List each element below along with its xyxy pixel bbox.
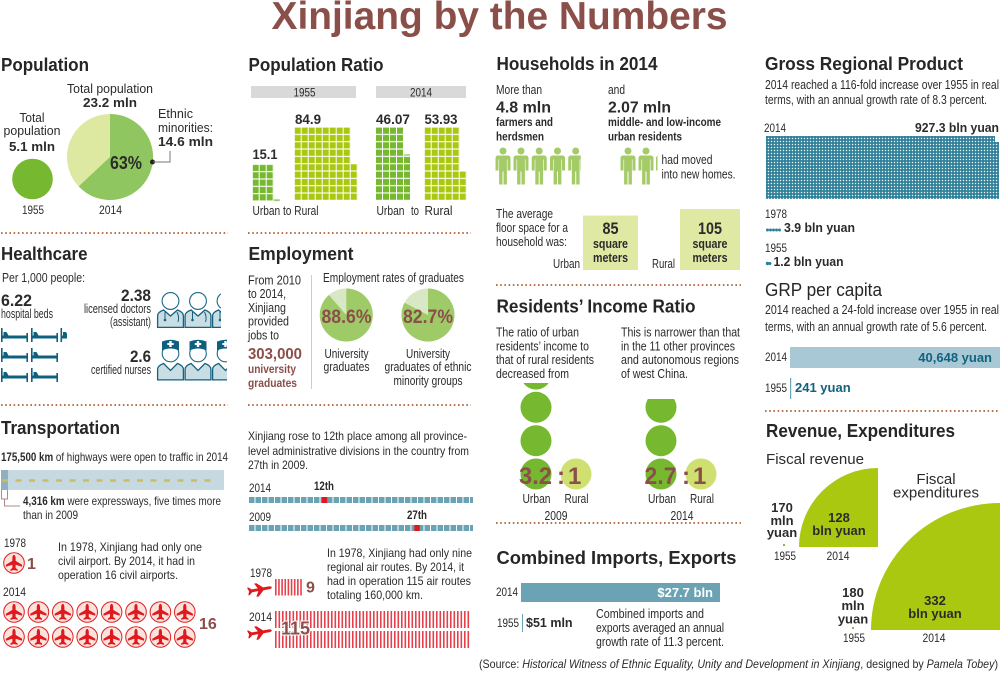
year labels: expenditures [843, 631, 946, 645]
text: growth rate: growth rate of 11.3 percent. [596, 635, 724, 649]
bar: 1955: 1955 [497, 616, 519, 630]
rank strip: 2009 [249, 508, 473, 531]
bar: per capita 1955: 1955 [765, 381, 787, 395]
bar: 1955: $51 mln [526, 616, 573, 630]
panel: healthcare [1, 244, 238, 382]
box: urban floor space: 85 [602, 219, 618, 238]
callout: expressways [2, 490, 221, 522]
box: urban floor space: Urban [553, 257, 580, 271]
heading: population: Population [1, 55, 89, 75]
label: 1955 total population: Total [20, 110, 45, 125]
year labels: 2014 [99, 203, 122, 217]
text: province rank: Xinjiang rose to 12th place among all province- [248, 429, 467, 443]
stat: licensed doctors: (assistant) [110, 315, 151, 329]
pie: ethnic minority graduates [401, 288, 454, 342]
stat: farmers and herdsmen: 4.8 mln [496, 100, 551, 116]
bar: 1955 [497, 614, 573, 632]
callout: ethnic minorities: Ethnic [158, 106, 193, 121]
text: province rank: level administrative divisions in the country from [248, 444, 469, 458]
icon row: nurses [156, 340, 227, 380]
text: fiscal expenditures label: Fiscal [916, 471, 956, 488]
chart: 2009 ratio: Rural [564, 492, 588, 506]
stat: urban residents: middle- and low-income [608, 115, 721, 129]
box: rural floor space: meters [692, 251, 728, 265]
quarter circle: fiscal revenue 2014 [799, 468, 878, 547]
chart: 2014 ratio: Rural [690, 492, 714, 506]
rank strip: 2014 [249, 479, 473, 503]
label: 1955 total population: 5.1 mln [9, 139, 55, 154]
year bar: 1955 [251, 86, 356, 100]
axis labels [252, 204, 452, 218]
year bar: 2014: 2014 [410, 86, 432, 100]
axis labels: Urban [376, 204, 405, 218]
fiscal revenue 1955: 170 [771, 500, 793, 515]
year bar: 2014 [376, 86, 466, 100]
bar: per capita 1955: 241 yuan [795, 380, 851, 395]
bar: per capita 2014: 40,648 yuan [918, 350, 992, 365]
text: west China: in the 11 other provinces [621, 340, 735, 354]
circle: 1955 population [12, 159, 53, 199]
quarter circle: fiscal expenditures 2014 [871, 503, 1000, 630]
values [252, 111, 458, 162]
text: civil airports: In 1978, Xinjiang had only one [58, 540, 202, 554]
callout: ethnic minorities [150, 106, 213, 164]
text: floor space: floor space for a [496, 221, 568, 235]
chart: 2014 ratio [644, 392, 716, 523]
heading: healthcare: Healthcare [1, 244, 88, 264]
text: floor space: The average [496, 207, 553, 221]
box: rural floor space [652, 209, 740, 271]
stat: urban residents: and [608, 83, 625, 97]
dot chart: 1955 [765, 241, 844, 269]
heading: GRP per capita: GRP per capita [765, 280, 883, 300]
quarter circle: fiscal revenue 2014: 128 [828, 510, 850, 525]
box: rural floor space: Rural [652, 257, 675, 271]
chart: 2014 urban squares [376, 127, 411, 200]
dot chart: 1978: 1978 [765, 207, 787, 221]
heading: income ratio: Residents’ Income Ratio [496, 296, 696, 316]
rank strip: 2009: 27th [407, 508, 427, 522]
text: west China [621, 326, 740, 381]
callout: ethnic minorities: 14.6 mln [158, 134, 213, 149]
panel: population [1, 55, 213, 217]
chart: 2014 ratio: 1 [693, 463, 706, 490]
air routes 1978: 1978 [250, 566, 272, 580]
stat: urban residents [608, 83, 721, 144]
text: jobs provided: university [248, 362, 296, 376]
chart: 2014 ratio: : [682, 463, 690, 490]
callout: expressways: than in 2009 [23, 508, 78, 522]
panel: employment [247, 244, 472, 390]
text: west China: and autonomous regions [621, 353, 739, 367]
icons: urban residents [620, 148, 658, 184]
stat: certified nurses: certified nurses [91, 363, 151, 377]
panel: households [496, 54, 740, 271]
fiscal revenue 1955: yuan [767, 525, 797, 540]
label: 2014 total population: 23.2 mln [83, 95, 137, 110]
bar: per capita 1955 [765, 378, 851, 399]
year labels: 1955 [22, 203, 44, 217]
text: jobs provided: Xinjiang [248, 300, 286, 315]
rank strip: 2014: 2014 [249, 481, 271, 495]
axis labels: Rural [424, 204, 452, 218]
air routes 1978: 9 [306, 580, 315, 596]
year labels [22, 203, 122, 217]
dot chart: 2014 [764, 121, 999, 199]
quarter circle: fiscal expenditures 2014: bln yuan [908, 606, 962, 621]
stat: licensed doctors [84, 286, 151, 329]
pie: university graduates [320, 288, 373, 342]
box: rural floor space: square [692, 237, 728, 251]
panel: imports and exports [496, 548, 736, 649]
year labels: revenue [774, 549, 850, 563]
text: civil airports [58, 540, 202, 582]
stat: hospital beds: hospital beds [1, 307, 53, 321]
dot chart: 2014: 927.3 bln yuan [915, 121, 999, 135]
stat: licensed doctors: licensed doctors [84, 302, 151, 316]
fiscal revenue 1955: mln [770, 513, 794, 528]
pie: 2014 ethnic minorities share: 63% [110, 153, 142, 173]
text: air routes: In 1978, Xinjiang had only nine [327, 546, 472, 560]
text: floor space: household was: [496, 235, 567, 249]
text: jobs provided: to 2014, [248, 286, 286, 301]
stat: hospital beds [1, 291, 53, 321]
stat: certified nurses [91, 347, 151, 377]
chart: 2009 ratio: 2009 [544, 509, 568, 523]
fiscal expenditures 1955: mln [841, 598, 865, 613]
callout: expressways: 4,316 km were expressways, five times more [23, 494, 221, 508]
heading: households: Households in 2014 [496, 54, 658, 74]
text: province rank: 27th in 2009. [248, 458, 308, 472]
axis labels: to [411, 204, 419, 218]
text: air routes: totaling 160,000 km. [327, 588, 423, 602]
values: 15.1 [252, 146, 278, 162]
text: jobs provided: graduates [248, 376, 297, 390]
panel: gross regional product [764, 54, 1000, 399]
label: 1955 total population: population [4, 123, 60, 138]
text: moved homes [662, 153, 736, 182]
text: jobs provided: provided [248, 314, 289, 328]
text: moved homes: had moved [662, 153, 713, 167]
panel: residents income ratio [496, 296, 740, 523]
rank strip: 2014: 12th [314, 479, 334, 493]
heading: transportation: Transportation [1, 418, 120, 438]
text: fiscal expenditures label: expenditures [893, 484, 979, 502]
pie: ethnic minority graduates: 82.7% [403, 307, 453, 328]
pie: university graduates: 88.6% [322, 307, 372, 328]
heading: revenue expenditures: Revenue, Expenditures [766, 421, 955, 441]
quarter circle: fiscal expenditures 2014: 332 [924, 593, 946, 608]
box: rural floor space: 105 [698, 219, 722, 238]
chart: 2009 ratio: 3.2 [519, 463, 552, 490]
year labels: expenditures: 2014 [922, 631, 946, 645]
values: 84.9 [295, 111, 321, 127]
year labels: expenditures: 1955 [843, 631, 865, 645]
year labels: revenue: 2014 [826, 549, 850, 563]
label: 1955 total population [4, 110, 60, 154]
stat: urban residents: 2.07 mln [608, 100, 671, 116]
text: province rank [248, 429, 469, 472]
bar: 2014: $27.7 bln [657, 585, 713, 600]
stat: farmers and herdsmen: herdsmen [496, 130, 544, 144]
label: ethnic minority graduates: graduates of ethnic [384, 360, 472, 374]
axis labels: Urban to Rural [252, 204, 318, 218]
callout: ethnic minorities: minorities: [158, 120, 213, 135]
text: west China: of west China. [621, 367, 688, 381]
chart: 2014 rural squares [425, 127, 467, 200]
text: ratio decrease [496, 326, 594, 381]
airports 2014 [3, 585, 217, 647]
bar: per capita 2014 [765, 347, 1000, 368]
values: 53.93 [424, 111, 458, 127]
text: growth rate: Combined imports and [596, 607, 704, 621]
bar: 2014 [496, 583, 720, 602]
pie: 2014 ethnic minorities share [67, 114, 153, 200]
label: ethnic minority graduates: minority groups [394, 374, 462, 388]
airports 2014: 2014 [3, 585, 26, 599]
dot chart: 2014: 2014 [764, 121, 786, 135]
source note: (Source: Historical Witness of Ethnic Equality, Unity and Development in Xinjiang, designed by Pamela Tobey) [479, 657, 998, 671]
air routes 2014: 115 [281, 618, 310, 638]
stat: farmers and herdsmen: farmers and [496, 115, 553, 129]
text: jobs provided: jobs to [247, 328, 279, 342]
chart: 2009 ratio: : [557, 463, 565, 490]
airports 1978: 1 [27, 556, 36, 573]
stat: hospital beds: 6.22 [1, 291, 32, 310]
icon row: doctors [156, 292, 221, 328]
rank strip: 2009: 2009 [249, 510, 271, 524]
text: ratio decrease: residents’ income to [496, 340, 589, 354]
fiscal revenue 1955 [767, 500, 797, 546]
heading: imports exports: Combined Imports, Exports [496, 548, 736, 568]
fiscal expenditures 1955: yuan [838, 612, 868, 626]
stat: urban residents: urban residents [608, 130, 682, 144]
box: urban floor space: square [593, 237, 628, 251]
dot chart: 1978: 3.9 bln yuan [784, 221, 855, 235]
text: GRP per capita growth [765, 303, 999, 334]
stat: farmers and herdsmen [496, 83, 553, 144]
icon row: hospital beds [1, 328, 67, 382]
chart: 2009 ratio [520, 383, 592, 520]
box: urban floor space [553, 216, 638, 271]
label: ethnic minority graduates: University [406, 347, 451, 361]
text: civil airports: operation 16 civil airports. [58, 568, 178, 582]
heading: GRP: Gross Regional Product [765, 54, 963, 74]
text: growth rate: exports averaged an annual [596, 621, 724, 635]
year bar: 1955: 1955 [294, 86, 316, 100]
icons: farmers [496, 148, 583, 184]
text: fiscal expenditures label [893, 471, 979, 502]
chart: 2009 ratio: Urban [522, 492, 551, 506]
panel: revenue and expenditures [766, 421, 1000, 645]
air routes 1978 [246, 566, 315, 598]
values: 46.07 [376, 111, 410, 127]
label: 2014 total population [67, 81, 153, 110]
chart: 2009 ratio: 1 [568, 463, 581, 490]
label: university graduates: graduates [324, 360, 370, 374]
chart: 2014 ratio: 2014 [670, 509, 694, 523]
text: civil airports: civil airport. By 2014, it had in [58, 554, 195, 568]
chart: 2014 ratio: Urban [648, 492, 676, 506]
chart: 1955 urban squares [253, 164, 280, 201]
air routes 2014: 2014 [249, 610, 272, 624]
air routes 2014 [246, 610, 470, 641]
heading: population ratio: Population Ratio [248, 55, 384, 75]
text: ratio decrease: that of rural residents [496, 353, 594, 367]
panel: transportation [1, 418, 473, 647]
text: jobs provided: 303,000 [248, 346, 302, 363]
text: growth rate [596, 607, 724, 649]
box: urban floor space: meters [593, 251, 628, 265]
text: employment rates heading: Employment rates of graduates [323, 271, 464, 285]
heading: employment: Employment [248, 244, 354, 264]
dot chart: 1955: 1955 [765, 241, 787, 255]
bar: 2014: 2014 [496, 585, 518, 599]
fiscal expenditures 1955 [838, 585, 868, 629]
airports 1978 [4, 536, 36, 573]
dot chart: 1955: 1.2 bln yuan [774, 255, 844, 269]
text: ratio decrease: The ratio of urban [496, 326, 579, 340]
chart: 2014 ratio: 2.7 [644, 463, 676, 490]
text: jobs provided: From 2010 [248, 272, 301, 288]
text: west China: This is narrower than that [621, 326, 740, 340]
stat: farmers and herdsmen: More than [496, 83, 542, 97]
text: moved homes: into new homes. [662, 168, 736, 182]
text: ratio decrease: decreased from [496, 367, 569, 381]
text: fiscal revenue label: Fiscal revenue [766, 451, 864, 468]
chart: 1955 rural squares [295, 127, 358, 200]
text: air routes [327, 546, 472, 602]
text: air routes: regional air routes. By 2014, it [327, 560, 465, 574]
label: university graduates: University [324, 347, 369, 361]
dot chart: 1978 [765, 207, 855, 235]
quarter circle: fiscal revenue 2014: bln yuan [812, 523, 866, 538]
airports 2014: 16 [199, 616, 217, 633]
label: ethnic minority graduates [384, 347, 472, 388]
intro text: Per 1,000 people: [2, 271, 85, 285]
text: GRP growth [765, 78, 999, 107]
text: air routes: had in operation 115 air routes [327, 574, 471, 588]
stat: licensed doctors: 2.38 [121, 286, 151, 305]
fiscal expenditures 1955: 180 [842, 585, 864, 600]
year labels: revenue: 1955 [774, 549, 796, 563]
bar: per capita 2014: 2014 [765, 350, 787, 364]
text: jobs provided [247, 272, 302, 390]
stat: certified nurses: 2.6 [130, 347, 151, 366]
label: 2014 total population: Total population [67, 81, 153, 96]
label: university graduates [324, 347, 370, 374]
road bar [1, 470, 224, 490]
text: floor space [496, 207, 568, 249]
text: highways: 175,500 km of highways were open to traffic in 2014 [1, 450, 228, 464]
airports 1978: 1978 [4, 536, 26, 550]
panel: population ratio [248, 55, 467, 218]
